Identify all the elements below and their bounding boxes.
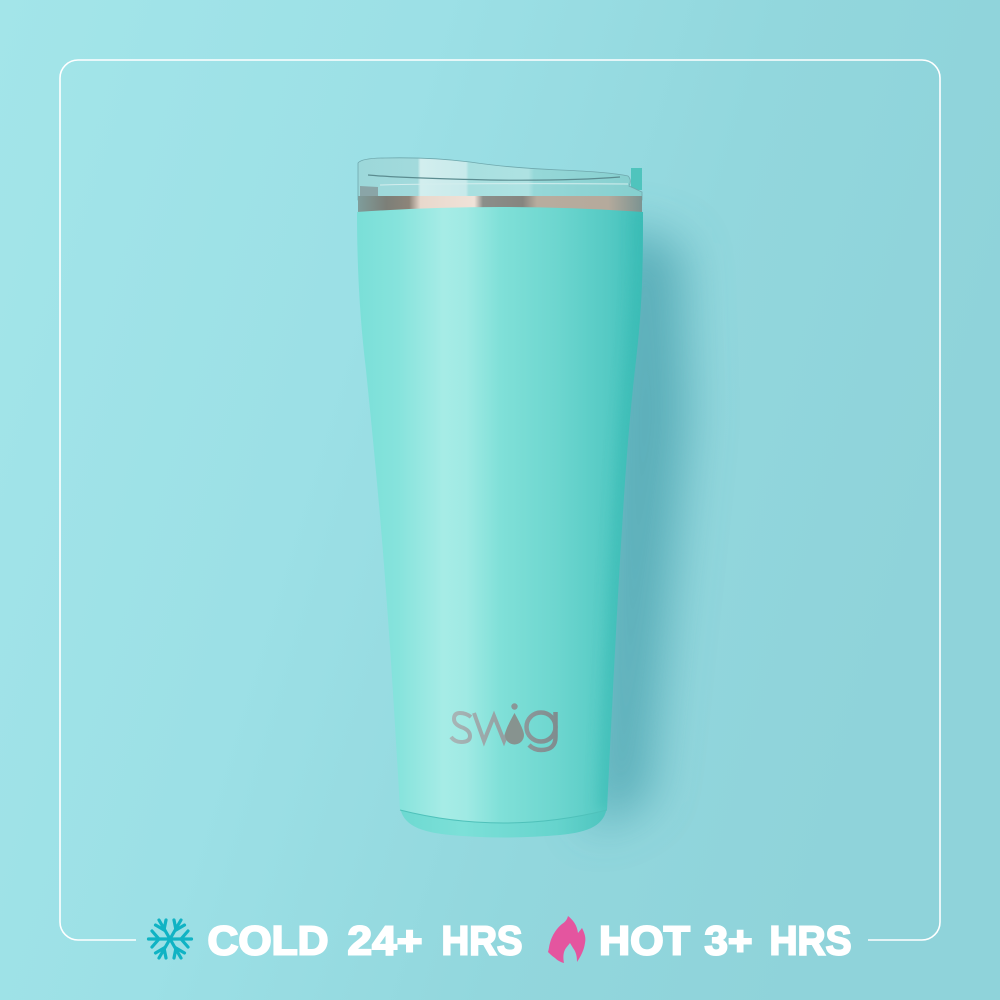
text: cold: 24+ xyxy=(348,918,422,964)
letter g xyxy=(526,712,556,742)
lid detail lines xyxy=(368,175,620,180)
base seam xyxy=(400,810,607,823)
letter g stem and tail xyxy=(529,712,556,750)
text: hot: HRS xyxy=(770,918,852,964)
text: cold xyxy=(208,918,522,964)
body right edge shade xyxy=(607,212,643,810)
letter w xyxy=(474,713,510,741)
lid tab xyxy=(631,168,642,190)
icon: snowflake xyxy=(148,920,192,958)
metal rim xyxy=(358,196,642,213)
base xyxy=(400,806,607,838)
white frame xyxy=(60,60,940,940)
dot of i xyxy=(511,703,518,710)
text: cold: COLD xyxy=(208,918,328,964)
text: cold: HRS xyxy=(442,918,522,964)
tumbler xyxy=(357,158,643,838)
icon: flame xyxy=(548,916,585,963)
label row xyxy=(148,916,852,964)
text: hot: HOT xyxy=(599,918,690,964)
text: hot: 3+ xyxy=(704,918,752,964)
tumbler shadow xyxy=(590,225,688,830)
text: hot xyxy=(599,918,852,964)
letter s xyxy=(451,713,471,742)
clear lid xyxy=(358,158,642,200)
water drop i xyxy=(505,713,524,744)
swig logo xyxy=(451,703,556,750)
body xyxy=(357,207,643,823)
